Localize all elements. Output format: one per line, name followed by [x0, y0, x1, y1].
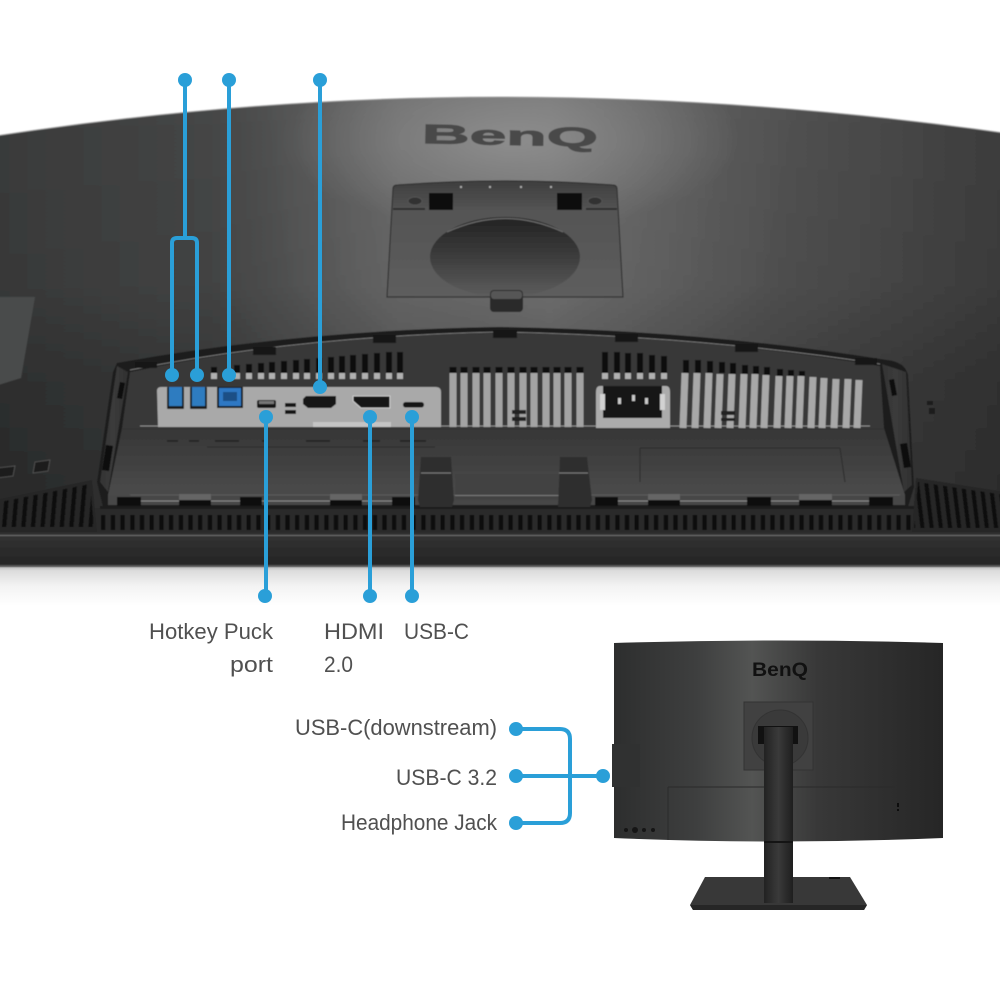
hotkey puck port	[257, 400, 276, 408]
label: HDMI 2.0: HDMI	[324, 619, 384, 644]
small monitor shell	[614, 640, 943, 842]
mount square	[744, 702, 813, 770]
connector: hotkey puck	[258, 410, 273, 603]
connector: USB-B	[222, 73, 236, 382]
small buttons	[624, 827, 655, 833]
BenQ logo: BenQ	[422, 119, 598, 153]
side dots	[927, 401, 935, 414]
connector: HDMI 2.0	[363, 410, 377, 603]
label: USB-C downstream: USB-C(downstream)	[295, 715, 497, 740]
USB-B port	[217, 387, 243, 408]
connector: HDMI top	[313, 73, 327, 394]
large monitor rear close-up	[0, 50, 1000, 567]
USB-A port 1	[167, 387, 184, 409]
stand latch	[490, 290, 523, 312]
power socket	[596, 386, 670, 428]
right bay wall	[882, 364, 912, 492]
callouts: top port connectors	[165, 73, 327, 394]
bay back wall	[122, 333, 884, 428]
monitor back shell	[0, 96, 1000, 509]
HDMI port	[303, 396, 336, 408]
label: USB-C: USB-C	[404, 619, 469, 644]
connector: USB-C	[405, 410, 419, 603]
lock slot	[285, 403, 296, 414]
upper vent slots	[214, 352, 400, 379]
cable hinges	[418, 457, 592, 507]
side vents	[0, 478, 1000, 532]
ledge line	[140, 425, 870, 427]
stand neck	[758, 726, 798, 903]
mount circle	[752, 710, 808, 766]
small BenQ logo: BenQ	[752, 660, 808, 681]
side buttons	[0, 460, 50, 478]
bay top rail	[130, 332, 880, 370]
power vent slots	[605, 352, 664, 379]
left side panel	[0, 297, 35, 386]
label: Hotkey Puck port: Hotkey Puck	[149, 619, 274, 644]
bay clips	[117, 494, 893, 506]
VESA mount recess	[387, 181, 623, 297]
port captions	[167, 440, 426, 442]
centre vent	[453, 367, 580, 427]
port bay	[97, 327, 914, 507]
callouts: bottom port connectors	[258, 410, 419, 603]
label: HDMI 2.0	[324, 619, 384, 677]
bottom vent strip	[0, 506, 1000, 534]
stand base	[690, 877, 867, 910]
connector: USB-A pair	[165, 73, 204, 382]
side port box front	[612, 744, 640, 787]
port plate	[157, 387, 441, 441]
label: USB-C 3.2: USB-C 3.2	[396, 765, 497, 790]
front lip	[0, 533, 1000, 567]
label: Headphone Jack: Headphone Jack	[341, 810, 498, 835]
right vent	[683, 360, 859, 428]
bay floor	[108, 428, 905, 495]
DisplayPort	[353, 396, 390, 408]
USB-A port 2	[190, 387, 207, 409]
side port box	[612, 744, 642, 787]
small monitor rear view	[612, 640, 943, 910]
label: HDMI 2.0: 2.0	[324, 652, 353, 677]
lower panel outline	[668, 787, 895, 840]
USB-C port	[403, 402, 424, 408]
small dots	[897, 803, 899, 811]
monitor shadow	[0, 566, 1000, 606]
bay outline	[97, 327, 914, 507]
left bay wall	[100, 366, 128, 492]
label: Hotkey Puck port: port	[230, 652, 273, 677]
connector: rear side bracket	[509, 722, 610, 830]
label: Hotkey Puck port	[149, 619, 274, 677]
